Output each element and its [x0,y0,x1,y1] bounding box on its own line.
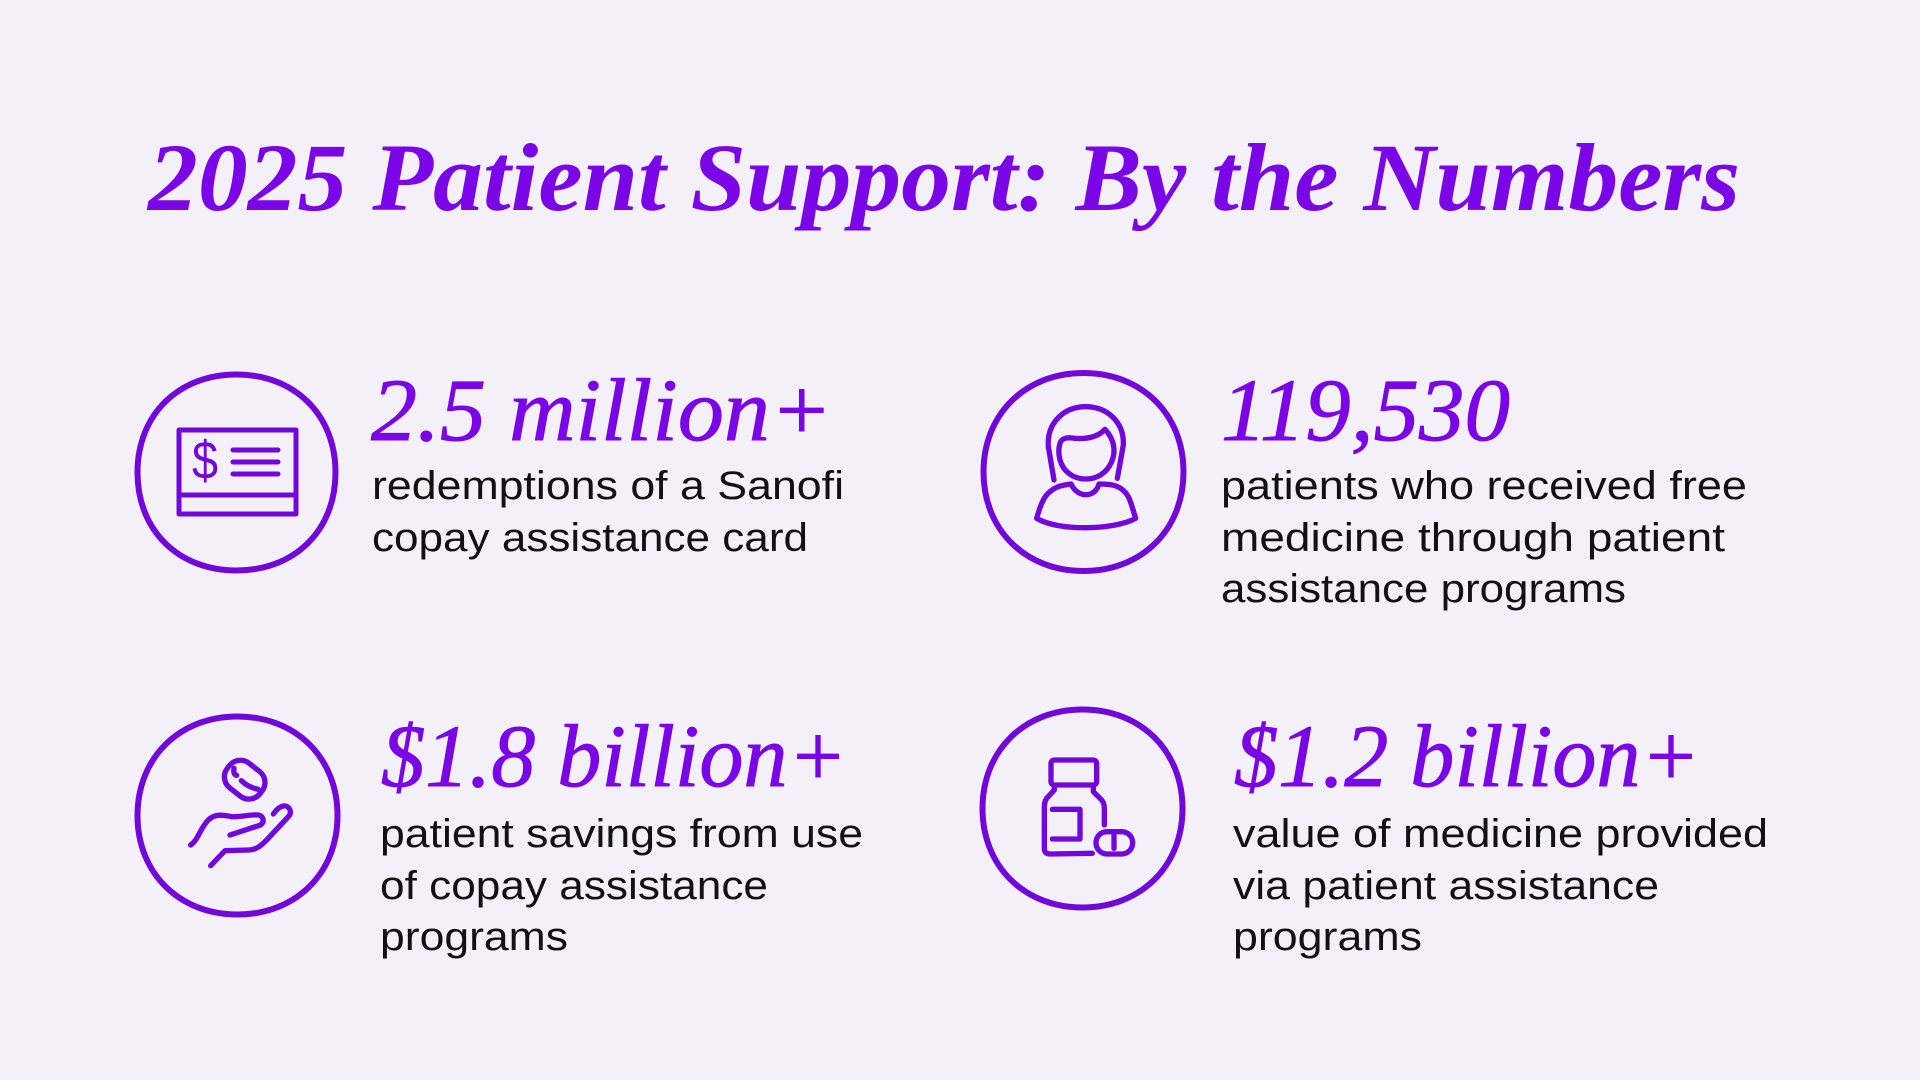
description: patient savings from use [380,812,863,856]
icon: copay card: $ [192,431,218,491]
description [1221,464,1747,611]
icon: hand with pill [138,716,338,914]
icon: patient [984,373,1184,571]
description [372,464,844,560]
description: patients who received free [1221,464,1747,508]
statistic: 119,530 [1221,362,1510,460]
statistic: 2.5 million+ [371,362,832,460]
description: medicine through patient [1221,516,1725,560]
description [380,812,863,959]
statistic: $1.8 billion+ [381,708,847,806]
description: value of medicine provided [1233,812,1768,856]
description: of copay assistance [380,864,768,908]
description: redemptions of a Sanofi [372,464,844,508]
description: via patient assistance [1233,864,1659,908]
icon: copay card [138,374,336,570]
title: 2025 Patient Support: By the Numbers [146,124,1740,231]
description: assistance programs [1221,567,1626,611]
panel: patient savings [138,708,863,959]
panel: free medicine patients [984,362,1747,611]
description: programs [1233,915,1422,959]
description: programs [380,915,568,959]
description [1233,812,1768,959]
icon: medicine bottle [982,710,1182,908]
panel: copay redemptions [138,362,844,570]
statistic: $1.2 billion+ [1234,708,1700,806]
description: copay assistance card [372,516,808,560]
panel: medicine value [982,708,1768,959]
